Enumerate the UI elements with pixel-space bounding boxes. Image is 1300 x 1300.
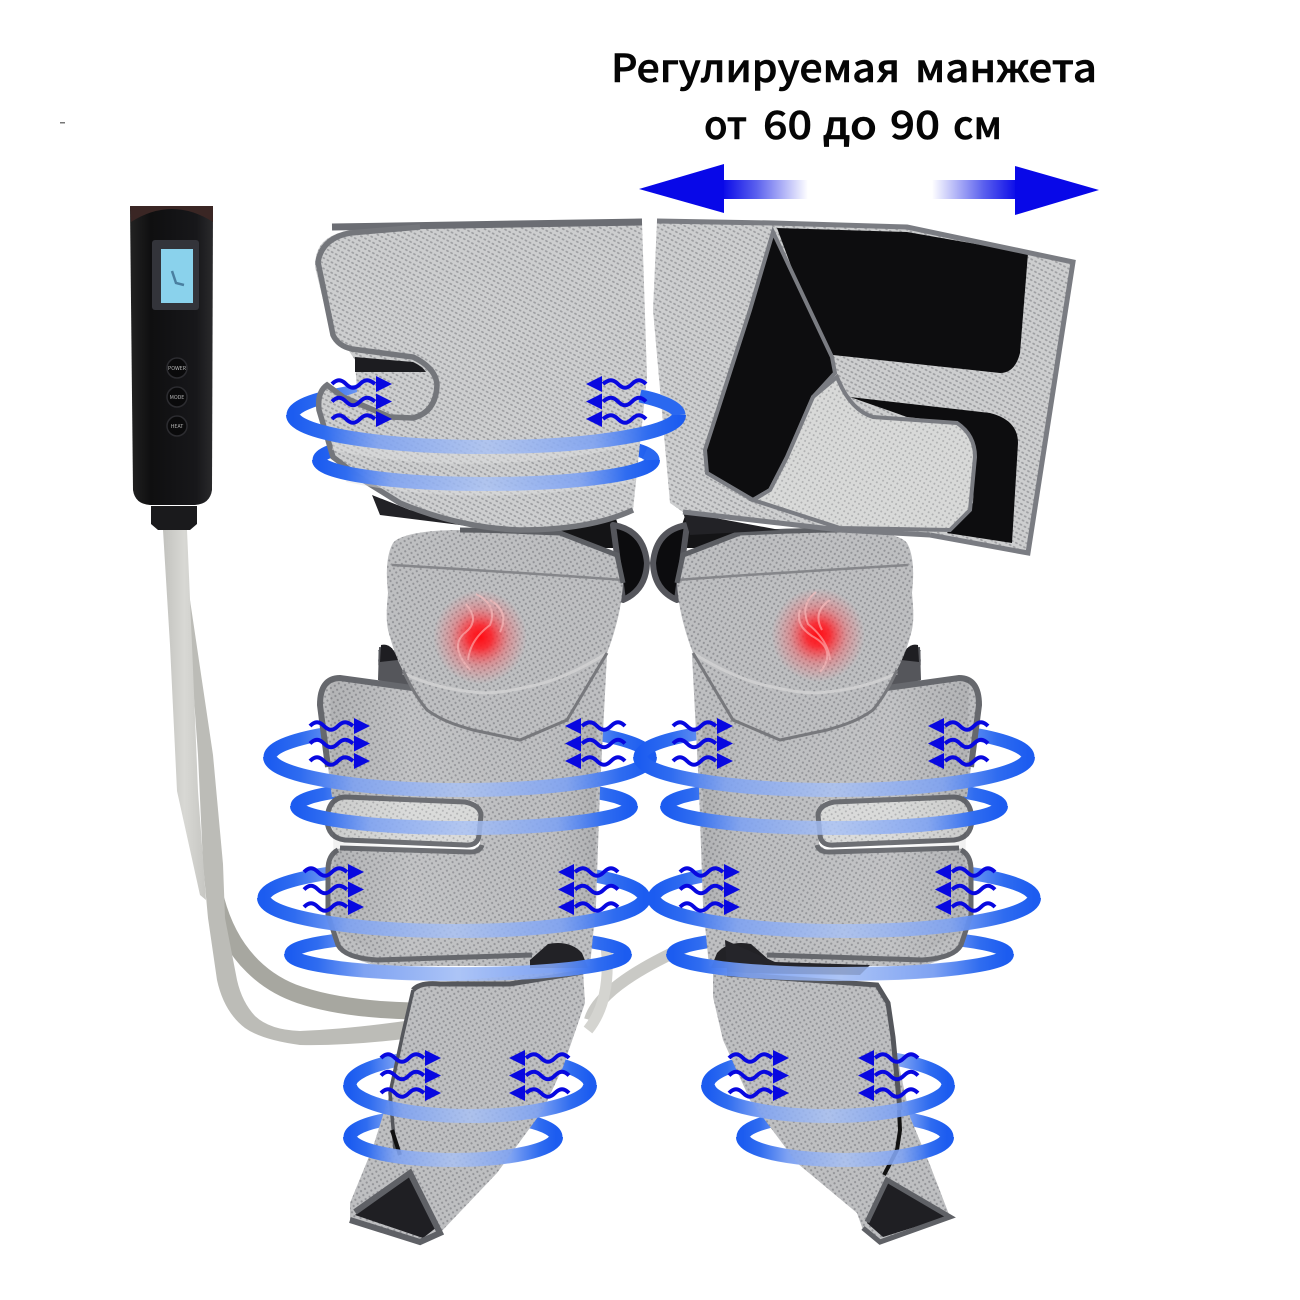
velcro strap <box>705 232 835 500</box>
buttons <box>167 358 187 436</box>
wave arrows: lower calf left, outer <box>304 864 364 915</box>
rings: back halves behind the cuffs <box>264 383 1034 1160</box>
title: 60 <box>763 95 812 151</box>
wave arrows: upper calf right, outer <box>928 718 988 769</box>
wave arrows: left foot, outer <box>381 1050 441 1101</box>
arrow: adjust left <box>639 164 808 213</box>
left foot cuff <box>350 970 585 1242</box>
wave arrows: lower calf left, inner <box>558 864 618 915</box>
wave arrows: left foot, inner <box>509 1050 569 1101</box>
button labels: MODE <box>170 394 184 401</box>
screen bezel <box>152 240 199 310</box>
title <box>611 38 1097 151</box>
wave arrows: thigh right <box>586 376 646 427</box>
edging <box>657 221 1073 553</box>
title: см <box>953 95 1002 151</box>
mesh body <box>653 221 1073 553</box>
right knee pad <box>653 513 913 740</box>
wave arrows: right foot, outer <box>858 1050 918 1101</box>
arrow: adjust right <box>932 166 1099 215</box>
speck <box>60 122 65 124</box>
velcro panel lower <box>850 397 1018 543</box>
right thigh cuff <box>653 221 1073 553</box>
right calf cuff <box>692 645 979 968</box>
heat spot: right knee <box>771 588 865 682</box>
title: Регулируемая <box>611 38 900 94</box>
ring tips crossing the right thigh <box>640 396 679 460</box>
strap <box>753 377 975 530</box>
title: 90 <box>890 95 940 151</box>
rings: translucent front halves <box>264 415 1034 1160</box>
connector <box>151 506 197 530</box>
velcro panel top <box>777 228 1028 373</box>
left calf cuff <box>320 645 607 968</box>
wave arrows: thigh left <box>332 376 392 427</box>
title: до <box>823 95 877 151</box>
wave arrows: upper calf right, inner <box>673 718 733 769</box>
button labels <box>168 365 187 430</box>
wave arrows: upper calf left, outer <box>310 718 370 769</box>
controller cap <box>130 206 213 222</box>
heat spot: left knee <box>433 590 527 684</box>
wave arrows: lower calf right, inner <box>680 864 740 915</box>
tubes: controller ribbon cables <box>163 530 690 1045</box>
button labels: POWER <box>168 365 187 372</box>
controller body <box>130 207 213 505</box>
left knee pad <box>387 513 647 740</box>
controller remote <box>130 206 213 530</box>
right foot cuff <box>713 940 950 1242</box>
LCD screen <box>161 249 193 303</box>
wave arrows: upper calf left, inner <box>565 718 625 769</box>
wave arrows: right foot, inner <box>729 1050 789 1101</box>
left thigh cuff <box>315 222 647 530</box>
wave arrows: lower calf right, outer <box>935 864 995 915</box>
title: манжета <box>915 38 1097 94</box>
button labels: HEAT <box>171 423 183 430</box>
title: от <box>704 95 747 151</box>
